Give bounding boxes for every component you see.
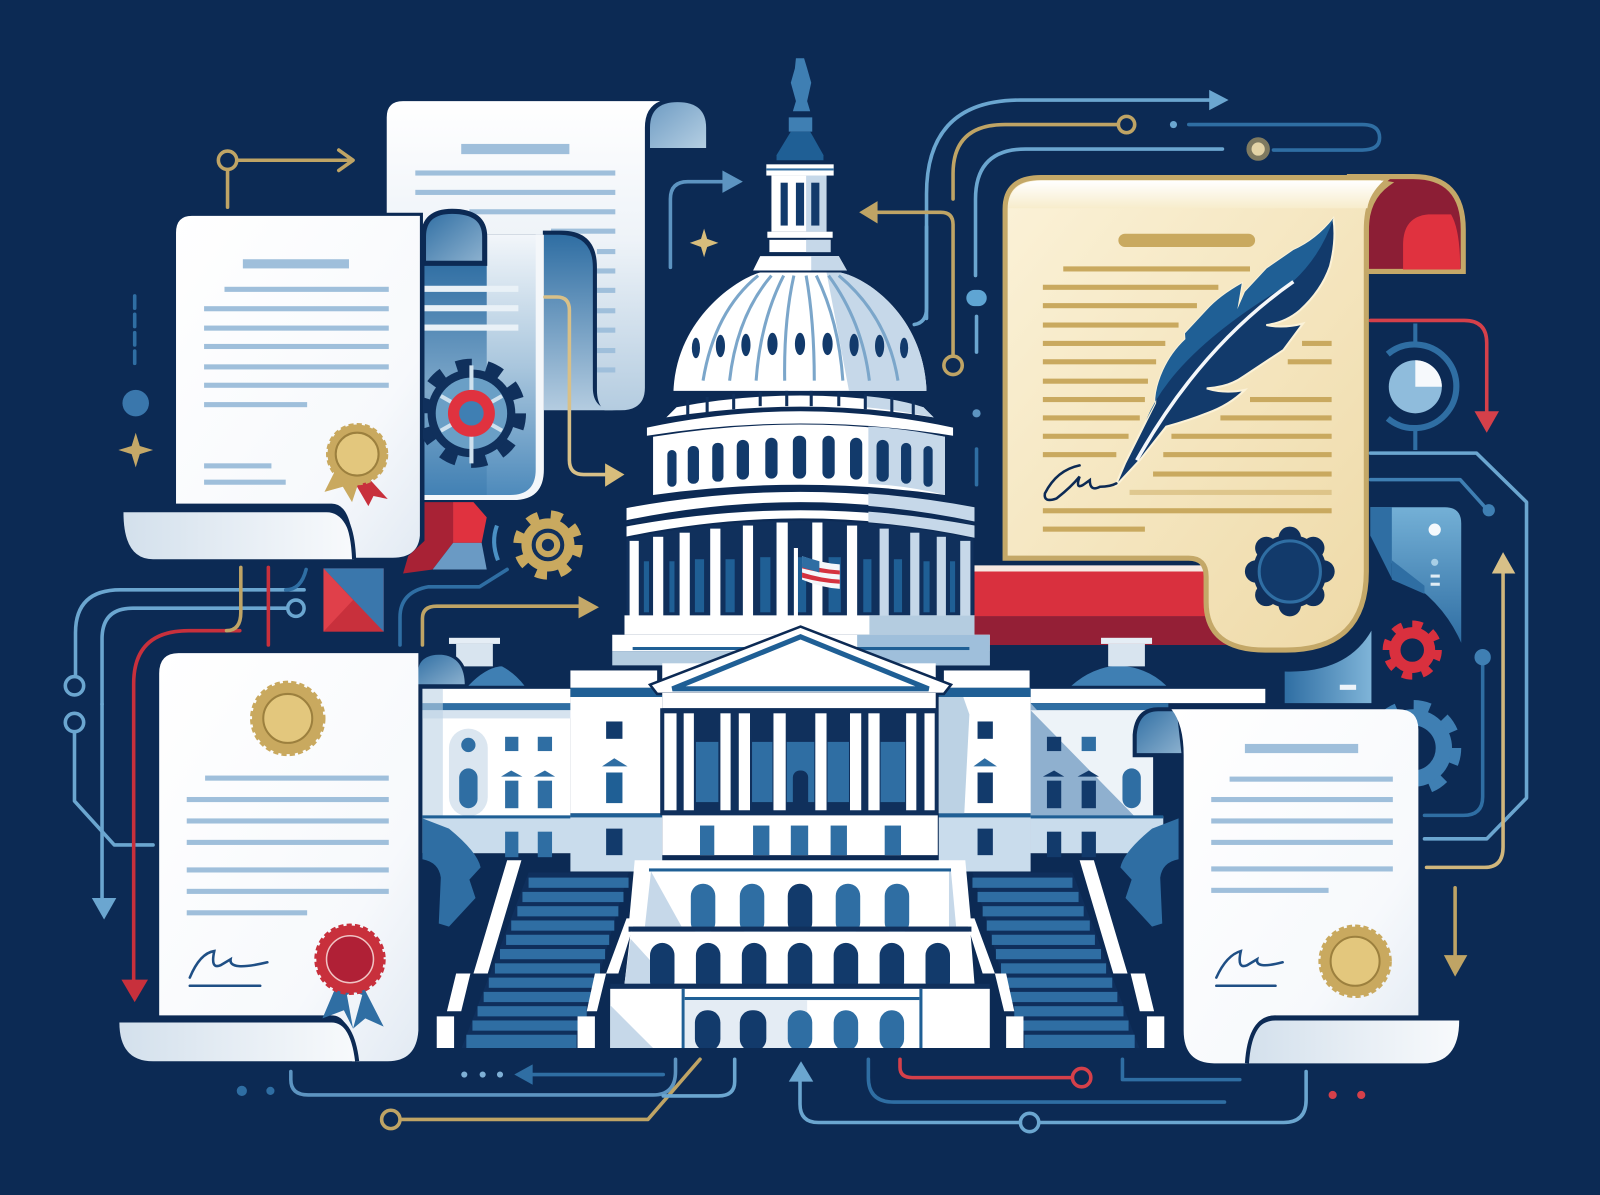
left circuit lines (65, 296, 507, 1002)
statue and lantern (766, 58, 834, 176)
pie dial icon (1388, 324, 1456, 450)
central terraces (429, 860, 1173, 1053)
signature (1216, 951, 1283, 986)
left wing body (422, 689, 570, 857)
text lines (1043, 266, 1332, 532)
inner rail (578, 918, 636, 1048)
blue gear icon (1370, 705, 1456, 791)
lower tier (610, 989, 990, 1051)
signature (1045, 465, 1116, 500)
main dome (673, 272, 927, 391)
text lines (204, 259, 389, 485)
red curl (1347, 177, 1463, 271)
lower portico band (662, 815, 938, 855)
small gear and red shapes (323, 502, 578, 632)
bottom curl (119, 1022, 357, 1061)
left staircase (437, 860, 636, 1049)
gold arrowhead two (579, 596, 599, 618)
wax seal (1245, 527, 1335, 616)
gear icon (423, 365, 519, 463)
text lines (187, 776, 389, 915)
parchment (1005, 178, 1388, 650)
sparkles and dots (118, 229, 981, 467)
document: top left scroll (123, 211, 485, 559)
document: gold scroll with quill (974, 177, 1463, 650)
title bar (1118, 234, 1255, 247)
document: bottom right scroll (1135, 709, 1459, 1063)
scroll curl top (650, 102, 706, 148)
bottom circuit lines (237, 1059, 1365, 1132)
connector lines (65, 90, 1527, 1132)
flag icon (794, 548, 840, 621)
outer rail (437, 860, 521, 1048)
document: middle transparent scroll with gear (423, 231, 624, 500)
quill feather icon (1115, 218, 1334, 487)
red and blue folded shape (403, 502, 498, 574)
arrow to dome blue (670, 182, 737, 267)
dome foundation (612, 615, 990, 665)
portico pediment (650, 627, 951, 694)
lower tier with colonnade (626, 491, 974, 617)
text lines (415, 170, 615, 372)
right gear silhouette (1120, 818, 1179, 927)
upper drum (753, 176, 847, 270)
title bar (461, 144, 569, 154)
red and blue diamond card (323, 568, 384, 632)
side wings (422, 638, 1265, 927)
right wing body (1031, 689, 1265, 857)
gold seal (324, 425, 388, 506)
red band (974, 565, 1250, 645)
red gear icon (1386, 624, 1438, 676)
top right circuit lines (859, 90, 1380, 485)
bottom curl (1247, 1020, 1459, 1063)
capitol building (422, 58, 1265, 1053)
middle tier (610, 932, 990, 994)
right pavilion (939, 670, 1031, 871)
gold arrow to dome (422, 606, 582, 645)
blue panel (1370, 507, 1461, 643)
dome base balustrade (647, 391, 953, 436)
top left gold arrow (218, 150, 353, 207)
gold connector arrow (545, 297, 624, 487)
right wing dome (1071, 665, 1166, 686)
left wing dome (468, 666, 524, 686)
text lines (424, 286, 518, 331)
right circuit lines (1370, 320, 1527, 977)
left gear silhouette (422, 818, 481, 927)
gold gear icon (518, 515, 578, 575)
text lines (1211, 777, 1393, 893)
blue arrow head (722, 170, 743, 193)
shoulders behind pediment (662, 663, 936, 688)
upper tier (629, 860, 971, 935)
gold seal (1320, 927, 1390, 996)
gold seal (252, 683, 323, 754)
central block (570, 627, 1031, 871)
right staircase (965, 860, 1164, 1049)
red seal (316, 926, 384, 1029)
peristyle drum (653, 425, 945, 495)
small panel (1285, 631, 1371, 703)
title bar (1245, 744, 1358, 753)
bottom curl (123, 512, 354, 559)
document: bottom left scroll (119, 653, 466, 1061)
document: top centre scroll (387, 101, 706, 410)
right side panels and icons (1285, 324, 1461, 791)
portico columns (660, 708, 938, 815)
base ground (429, 1048, 1173, 1053)
left pavilion (570, 670, 662, 871)
signature (190, 951, 267, 986)
navy outline and curl (480, 231, 618, 414)
